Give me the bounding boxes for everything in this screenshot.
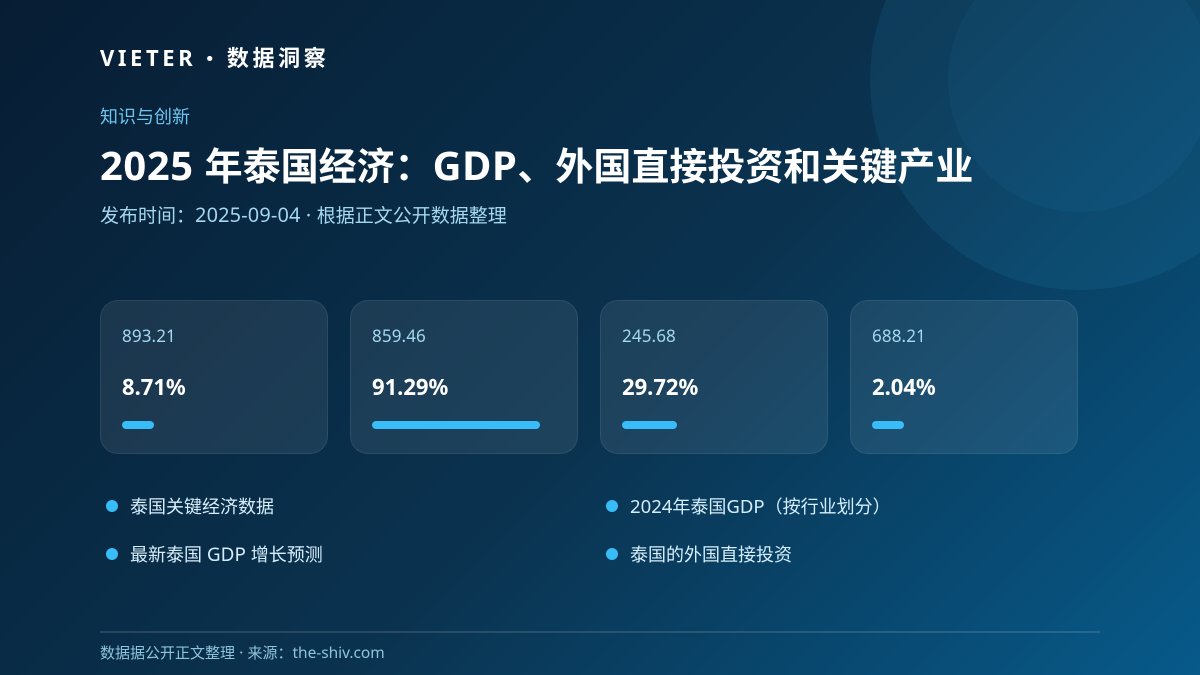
title: 2025 年泰国经济：GDP、外国直接投资和关键产业: [100, 136, 973, 192]
card 1 value: 893.21: [122, 324, 176, 347]
stat card 1: [100, 300, 328, 454]
card 4 percentage: 2.04%: [872, 372, 936, 402]
card 3 value: 245.68: [622, 324, 676, 347]
list item 4: 泰国的外国直接投资: [630, 541, 792, 567]
card 1 bar: [122, 421, 154, 429]
card 3 percentage: 29.72%: [622, 372, 698, 402]
decorative circle: inner: [948, 0, 1200, 212]
stat card 2: [350, 300, 578, 454]
card 2 bar: [372, 421, 540, 429]
footer source: 数据据公开正文整理 · 来源：the-shiv.com: [100, 641, 385, 663]
list item 2: 2024年泰国GDP（按行业划分）: [630, 493, 891, 519]
brand header: VIETER · 数据洞察: [100, 37, 329, 78]
stat card 3: [600, 300, 828, 454]
footer divider: [100, 631, 1100, 633]
card 1 percentage: 8.71%: [122, 372, 186, 402]
card 3 bar: [622, 421, 677, 429]
list item 1: 泰国关键经济数据: [130, 493, 274, 519]
list item 3: 最新泰国 GDP 增长预测: [130, 541, 323, 567]
stat card 4: [850, 300, 1078, 454]
publication date: 发布时间：2025-09-04 · 根据正文公开数据整理: [100, 201, 507, 228]
card 2 value: 859.46: [372, 324, 426, 347]
decorative circle: outer: [870, 0, 1200, 290]
eyebrow label: 知识与创新: [100, 103, 190, 129]
card 4 bar: [872, 421, 904, 429]
card 4 value: 688.21: [872, 324, 926, 347]
card 2 percentage: 91.29%: [372, 372, 448, 402]
